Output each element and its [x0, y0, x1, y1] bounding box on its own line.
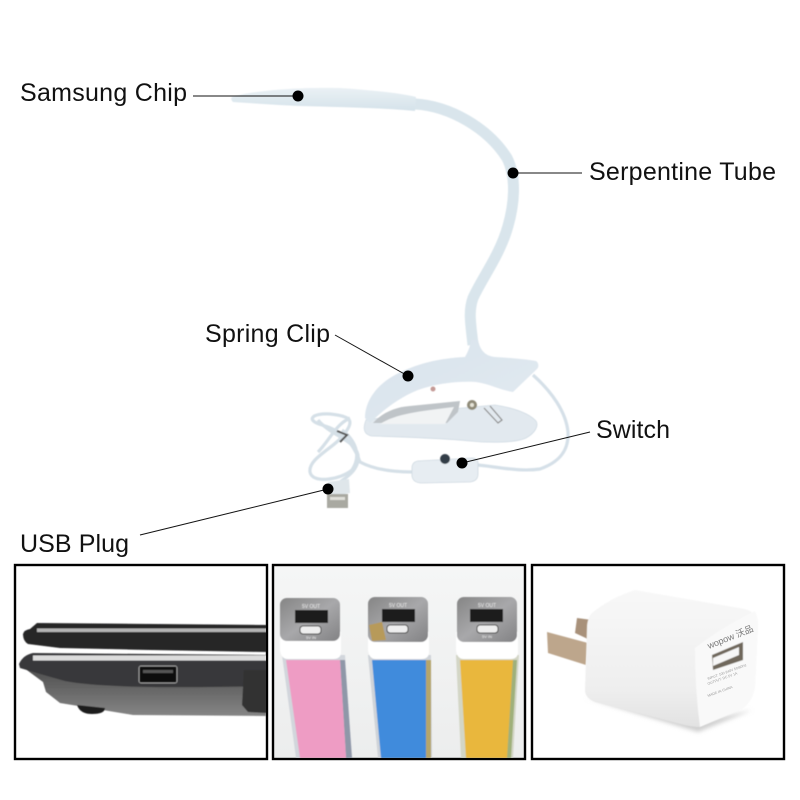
leader dot: switch: [456, 458, 468, 468]
leader dot: usb plug: [322, 484, 334, 494]
panel: power banks: [273, 565, 525, 759]
lamp product photo: [231, 88, 568, 508]
charger brand text: wopow 沃品: [705, 623, 755, 651]
usb plug: [328, 479, 350, 497]
label: samsung chip: Samsung Chip: [20, 79, 187, 107]
spring clip lower jaw: [364, 405, 537, 442]
laptop usb port: [139, 666, 177, 683]
power bank: pink: 5V OUT: [302, 604, 320, 610]
power bank: yellow: [456, 597, 519, 758]
panel: laptop usb port: [15, 565, 267, 759]
charger rating text: INPUT: 100-240V 50/60Hz: [707, 663, 747, 681]
charger usb port: [712, 642, 743, 670]
inline switch: [412, 458, 478, 483]
label: switch: Switch: [596, 416, 670, 444]
label: serpentine tube: Serpentine Tube: [589, 158, 776, 186]
charger shadow: [586, 698, 752, 732]
power bank: pink: [280, 598, 352, 758]
panel: usb wall charger: [532, 565, 784, 759]
laptop base upper shell: [19, 653, 267, 687]
leader dot: samsung chip: [292, 90, 304, 102]
charger rating text: MADE IN CHINA: [707, 685, 734, 698]
power bank: blue: [368, 597, 432, 758]
charger rating text: [707, 663, 747, 698]
leader dot: serpentine tube: [508, 168, 518, 178]
label: usb plug: USB Plug: [20, 530, 129, 558]
laptop lid: [23, 623, 267, 652]
leader line: switch: [462, 432, 590, 463]
laptop base lower shell: [20, 665, 267, 716]
laptop foot: [77, 705, 105, 714]
label: spring clip: Spring Clip: [205, 320, 330, 348]
leader line: usb plug: [140, 489, 328, 535]
power cord: [478, 375, 568, 470]
leader line: samsung chip: [193, 95, 298, 97]
charger body: [585, 590, 758, 727]
switch button: [440, 454, 450, 464]
power bank: blue: 5V OUT: [389, 603, 407, 609]
charger rating text: OUTPUT: DC 5V 1A: [707, 671, 739, 686]
clip paper clip: [484, 406, 502, 423]
clip pivot screw: [467, 400, 477, 410]
leader line: serpentine tube: [513, 172, 582, 174]
charger prong rear: [575, 618, 592, 640]
usb cord loops: [310, 414, 412, 482]
leader line: spring clip: [335, 335, 408, 376]
power bank: yellow: 5V IN: [482, 634, 492, 639]
power bank: yellow: 5V OUT: [478, 603, 496, 609]
clip indicator: [430, 386, 436, 392]
lamp head: [231, 88, 416, 111]
spring clip opening: [373, 401, 460, 423]
lamp serpentine tube: [415, 104, 514, 345]
charger prong front: [547, 632, 588, 665]
spring clip upper jaw: [365, 340, 538, 423]
laptop side door: [242, 670, 267, 713]
power bank: pink: 5V IN: [306, 635, 316, 640]
leader dot: spring clip: [402, 370, 414, 382]
